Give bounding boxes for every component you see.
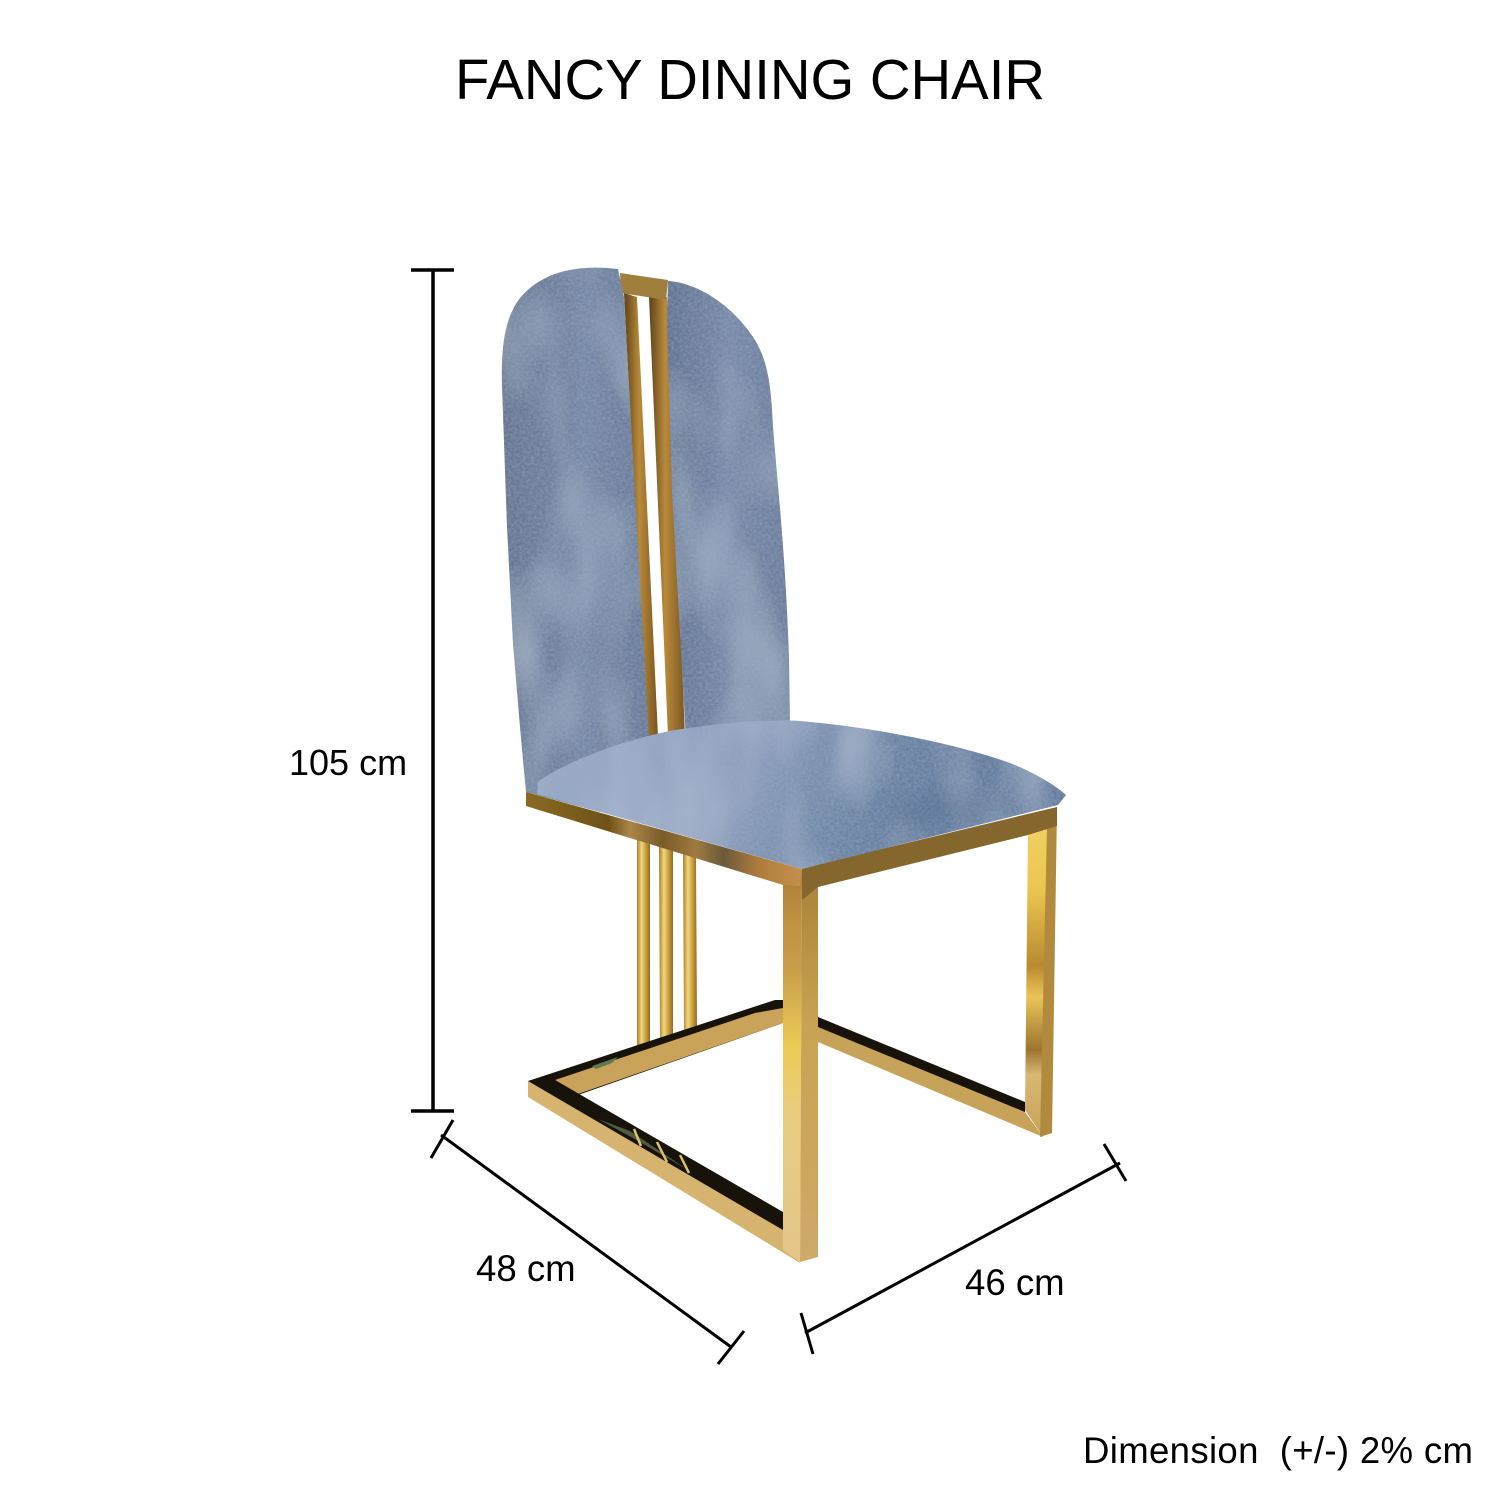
height label: 105 cm <box>289 742 407 783</box>
backrest centre rods and top bar <box>620 273 685 736</box>
base frame front-left rail <box>528 1080 800 1263</box>
depth label: 48 cm <box>476 1248 576 1289</box>
dimension tolerance note: Dimension (+/-) 2% cm <box>1083 1430 1473 1471</box>
height dimension line <box>411 270 454 1111</box>
backrest left panel <box>502 268 652 812</box>
width label: 46 cm <box>965 1262 1065 1303</box>
title: FANCY DINING CHAIR <box>455 48 1045 111</box>
chair photo <box>502 268 1066 1263</box>
depth dimension line <box>431 1120 744 1364</box>
width dimension line <box>801 1144 1126 1354</box>
right leg <box>1025 808 1057 1137</box>
backrest right panel <box>667 281 790 740</box>
seat frame rails <box>526 792 1057 900</box>
base frame rear rails <box>528 1000 1043 1137</box>
seat cushion <box>537 721 1066 869</box>
rear rods under seat <box>637 840 697 1054</box>
front leg <box>783 870 818 1262</box>
